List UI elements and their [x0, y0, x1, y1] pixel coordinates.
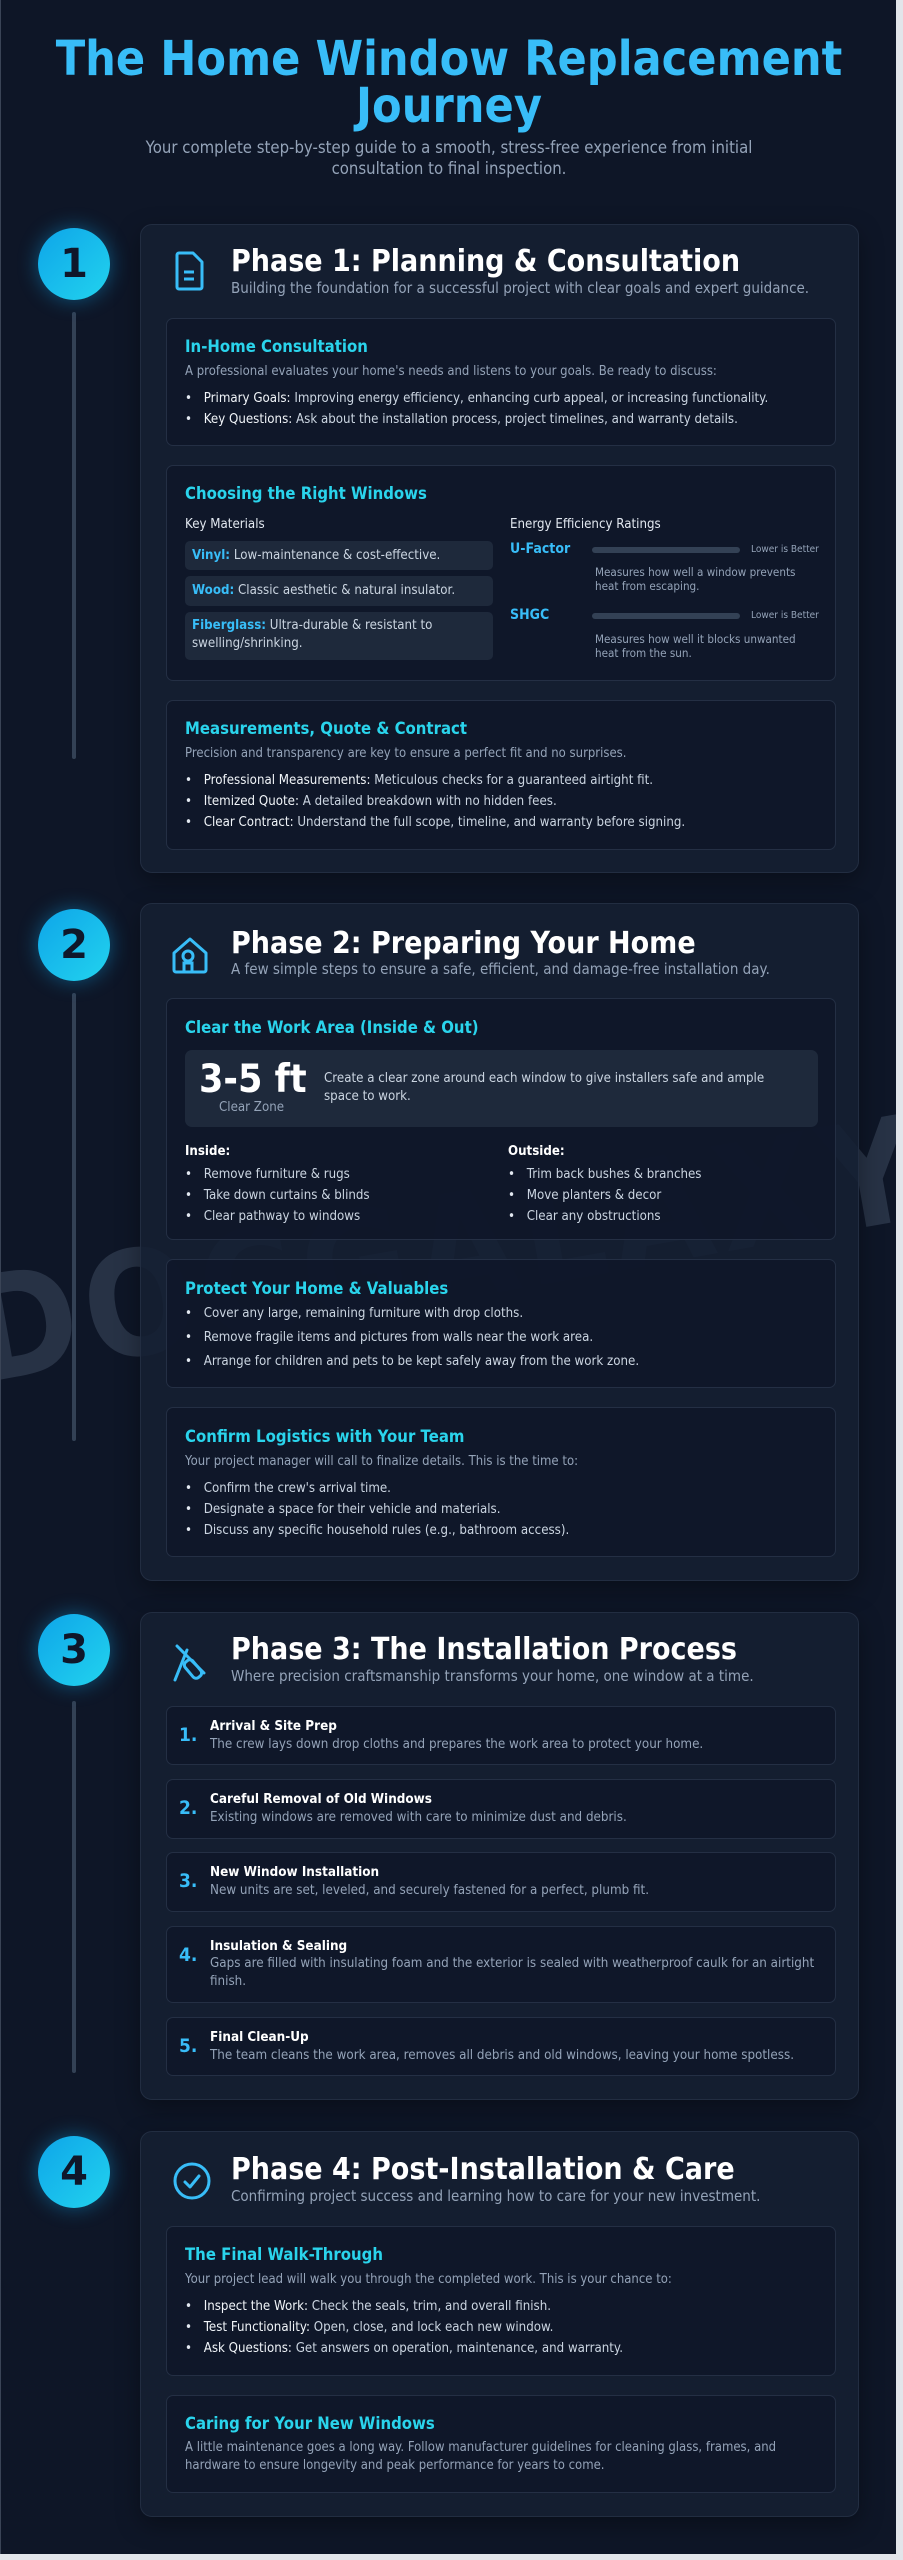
step 3: New units are set, leveled, and securely fastened for a perfect, plumb fit.	[210, 1883, 649, 1898]
step circle 3	[38, 1614, 110, 1686]
phase 1 subtitle: Building the foundation for a successful project with clear goals and expert guidance.	[231, 279, 809, 297]
material: fiberglass: Fiberglass: Ultra-durable & resistant to	[192, 618, 432, 633]
phase 1 heading: Phase 1: Planning & Consultation	[231, 244, 740, 279]
step 4: finish.	[210, 1974, 246, 1989]
step 5	[166, 2017, 836, 2076]
step 4: Insulation & Sealing	[210, 1939, 347, 1954]
step 5: The team cleans the work area, removes all debris and old windows, leaving your home spotless.	[210, 2048, 794, 2063]
step 1	[166, 1706, 836, 1765]
subpanel: caring for windows	[166, 2395, 836, 2493]
subpanel: confirm logistics: Your project manager will call to finalize details. This is the time to:	[185, 1454, 578, 1469]
step 5: Final Clean-Up	[210, 2030, 309, 2045]
step 3: 3.	[179, 1870, 197, 1892]
icon: check circle	[174, 2162, 210, 2200]
step circle 4: 4	[60, 2149, 88, 2195]
subpanel: confirm logistics: Confirm the crew's arrival time.	[204, 1481, 391, 1496]
step 1: The crew lays down drop cloths and prepares the work area to protect your home.	[210, 1737, 703, 1752]
panel: phase 2	[140, 903, 859, 1581]
material: wood: Wood: Classic aesthetic & natural insulator.	[192, 583, 455, 598]
subtitle	[146, 138, 752, 178]
icon: document	[176, 252, 204, 290]
material: fiberglass: swelling/shrinking.	[192, 636, 303, 651]
title	[56, 31, 842, 134]
step circle 3: 3	[60, 1627, 88, 1673]
subpanel: protect your home: Protect Your Home & Valuables	[185, 1279, 448, 1298]
step 2: Careful Removal of Old Windows	[210, 1792, 432, 1807]
title: Journey	[356, 78, 542, 134]
subpanel: final walk-through: The Final Walk-Through	[185, 2245, 383, 2264]
step circle 4	[38, 2136, 110, 2208]
rating: u-factor: Lower is Better	[751, 544, 819, 555]
list: outside: Outside:	[508, 1144, 565, 1159]
subpanel: clear the work area	[166, 998, 836, 1240]
material: vinyl: Vinyl: Low-maintenance & cost-effective.	[192, 548, 440, 563]
timeline line 3	[72, 1701, 76, 2073]
subpanel: in-home consultation: Primary Goals: Improving energy efficiency, enhancing curb appeal, or increasing functionality.	[204, 391, 768, 406]
step circle 1	[38, 228, 110, 300]
subpanel: measurements: Professional Measurements: Meticulous checks for a guaranteed airtight fit.	[204, 773, 653, 788]
step 4	[166, 1926, 836, 2003]
step circle 2	[38, 909, 110, 981]
list: inside	[185, 1144, 370, 1224]
subpanel: caring for windows: A little maintenance goes a long way. Follow manufacturer guidelines for cleaning glass, frames, and	[185, 2440, 776, 2455]
timeline line 2	[72, 993, 76, 1441]
rating: shgc: Lower is Better	[751, 610, 819, 621]
subpanel: clear the work area: Clear the Work Area (Inside & Out)	[185, 1018, 479, 1037]
material: fiberglass	[185, 612, 493, 660]
subpanel: measurements: Itemized Quote: A detailed breakdown with no hidden fees.	[204, 794, 557, 809]
subpanel: choosing windows: Choosing the Right Windows	[185, 484, 427, 503]
step 3: New Window Installation	[210, 1865, 379, 1880]
list: outside	[508, 1144, 702, 1224]
callout: 3-5 ft clear zone: space to work.	[324, 1089, 411, 1104]
material: vinyl	[185, 541, 493, 570]
step 2: 2.	[179, 1797, 197, 1819]
subpanel: confirm logistics: Confirm Logistics with Your Team	[185, 1427, 464, 1446]
subpanel: measurements: Precision and transparency are key to ensure a perfect fit and no surprises.	[185, 746, 626, 761]
phase 4 heading: Phase 4: Post-Installation & Care	[231, 2152, 735, 2187]
subpanel: confirm logistics: Designate a space for their vehicle and materials.	[204, 1502, 500, 1517]
callout: 3-5 ft clear zone: 3-5 ft	[199, 1057, 307, 1102]
subpanel: final walk-through: Inspect the Work: Check the seals, trim, and overall finish.	[204, 2299, 551, 2314]
step circle 1: 1	[60, 241, 88, 287]
subtitle: consultation to final inspection.	[332, 159, 566, 178]
step 2	[166, 1779, 836, 1839]
subpanel: confirm logistics: Discuss any specific household rules (e.g., bathroom access).	[204, 1523, 569, 1538]
step 4: Gaps are filled with insulating foam and the exterior is sealed with weatherproof caulk for an airtight	[210, 1956, 814, 1971]
list: inside: Remove furniture & rugs	[204, 1167, 350, 1182]
subpanel: in-home consultation: Key Questions: Ask about the installation process, project timelines, and warranty details.	[204, 412, 738, 427]
subpanel: caring for windows: Caring for Your New Windows	[185, 2414, 435, 2433]
rating: u-factor: Measures how well a window prevents	[595, 565, 795, 579]
callout: 3-5 ft clear zone	[185, 1050, 818, 1127]
step 1: 1.	[179, 1724, 197, 1746]
phase 3 subtitle: Where precision craftsmanship transforms your home, one window at a time.	[231, 1667, 754, 1685]
icon: tools	[174, 1644, 206, 1682]
list: inside: Clear pathway to windows	[204, 1209, 360, 1224]
step 1: Arrival & Site Prep	[210, 1719, 337, 1734]
subpanel: choosing windows: Energy Efficiency Ratings	[510, 517, 661, 532]
subpanel: choosing windows: Key Materials	[185, 517, 265, 532]
subpanel: final walk-through: Test Functionality: Open, close, and lock each new window.	[204, 2320, 553, 2335]
subpanel: final walk-through: Your project lead will walk you through the completed work. This is your chance to:	[185, 2272, 672, 2287]
rating: u-factor: U-Factor	[510, 541, 570, 557]
step 2: Existing windows are removed with care to minimize dust and debris.	[210, 1810, 627, 1825]
icon: house	[172, 938, 208, 974]
title: The Home Window Replacement	[56, 31, 842, 87]
callout: 3-5 ft clear zone: Clear Zone	[219, 1100, 284, 1115]
phase 2 heading: Phase 2: Preparing Your Home	[231, 926, 696, 961]
subpanel: in-home consultation	[166, 318, 836, 446]
subpanel: in-home consultation: In-Home Consultation	[185, 337, 368, 356]
subpanel: protect your home	[166, 1259, 836, 1388]
rating: u-factor	[510, 541, 819, 593]
panel: phase 1	[140, 224, 859, 873]
subpanel: choosing windows	[166, 465, 836, 681]
subpanel: protect your home: Cover any large, remaining furniture with drop cloths.	[204, 1306, 523, 1321]
list: inside: Inside:	[185, 1144, 230, 1159]
material: wood	[185, 576, 493, 606]
list: outside: Clear any obstructions	[527, 1209, 661, 1224]
subpanel: protect your home: Remove fragile items and pictures from walls near the work area.	[204, 1330, 593, 1345]
subpanel: measurements: Clear Contract: Understand the full scope, timeline, and warranty before signing.	[204, 815, 685, 830]
timeline line 1	[72, 312, 76, 759]
phase 4 subtitle: Confirming project success and learning how to care for your new investment.	[231, 2187, 760, 2205]
rating: shgc: SHGC	[510, 607, 549, 623]
rating: shgc	[510, 607, 819, 660]
callout: 3-5 ft clear zone: Create a clear zone around each window to give installers safe and ample	[324, 1071, 764, 1086]
rating: shgc: heat from the sun.	[595, 646, 692, 660]
subtitle: Your complete step-by-step guide to a smooth, stress-free experience from initial	[146, 138, 752, 157]
subpanel: caring for windows: hardware to ensure longevity and peak performance for years to come.	[185, 2458, 605, 2473]
subpanel: measurements: Measurements, Quote & Contract	[185, 719, 467, 738]
subpanel: final walk-through: Ask Questions: Get answers on operation, maintenance, and warranty.	[204, 2341, 623, 2356]
phase 2 subtitle: A few simple steps to ensure a safe, efficient, and damage-free installation day.	[231, 960, 770, 978]
rating: shgc: Measures how well it blocks unwanted	[595, 632, 796, 646]
phase 3 heading: Phase 3: The Installation Process	[231, 1632, 737, 1667]
step 3	[166, 1852, 836, 1912]
rating: u-factor: heat from escaping.	[595, 579, 699, 593]
subpanel: in-home consultation: A professional evaluates your home's needs and listens to your goals. Be ready to discuss:	[185, 364, 717, 379]
panel: phase 4	[140, 2131, 859, 2517]
list: outside: Move planters & decor	[527, 1188, 661, 1203]
step 4: 4.	[179, 1944, 197, 1966]
panel: phase 3	[140, 1612, 859, 2100]
step circle 2: 2	[60, 922, 88, 968]
step 5: 5.	[179, 2035, 197, 2057]
subpanel: confirm logistics	[166, 1407, 836, 1557]
subpanel: measurements	[166, 700, 836, 850]
subpanel: protect your home: Arrange for children and pets to be kept safely away from the work zone.	[204, 1354, 639, 1369]
list: outside: Trim back bushes & branches	[527, 1167, 702, 1182]
subpanel: final walk-through	[166, 2226, 836, 2376]
list: inside: Take down curtains & blinds	[204, 1188, 370, 1203]
